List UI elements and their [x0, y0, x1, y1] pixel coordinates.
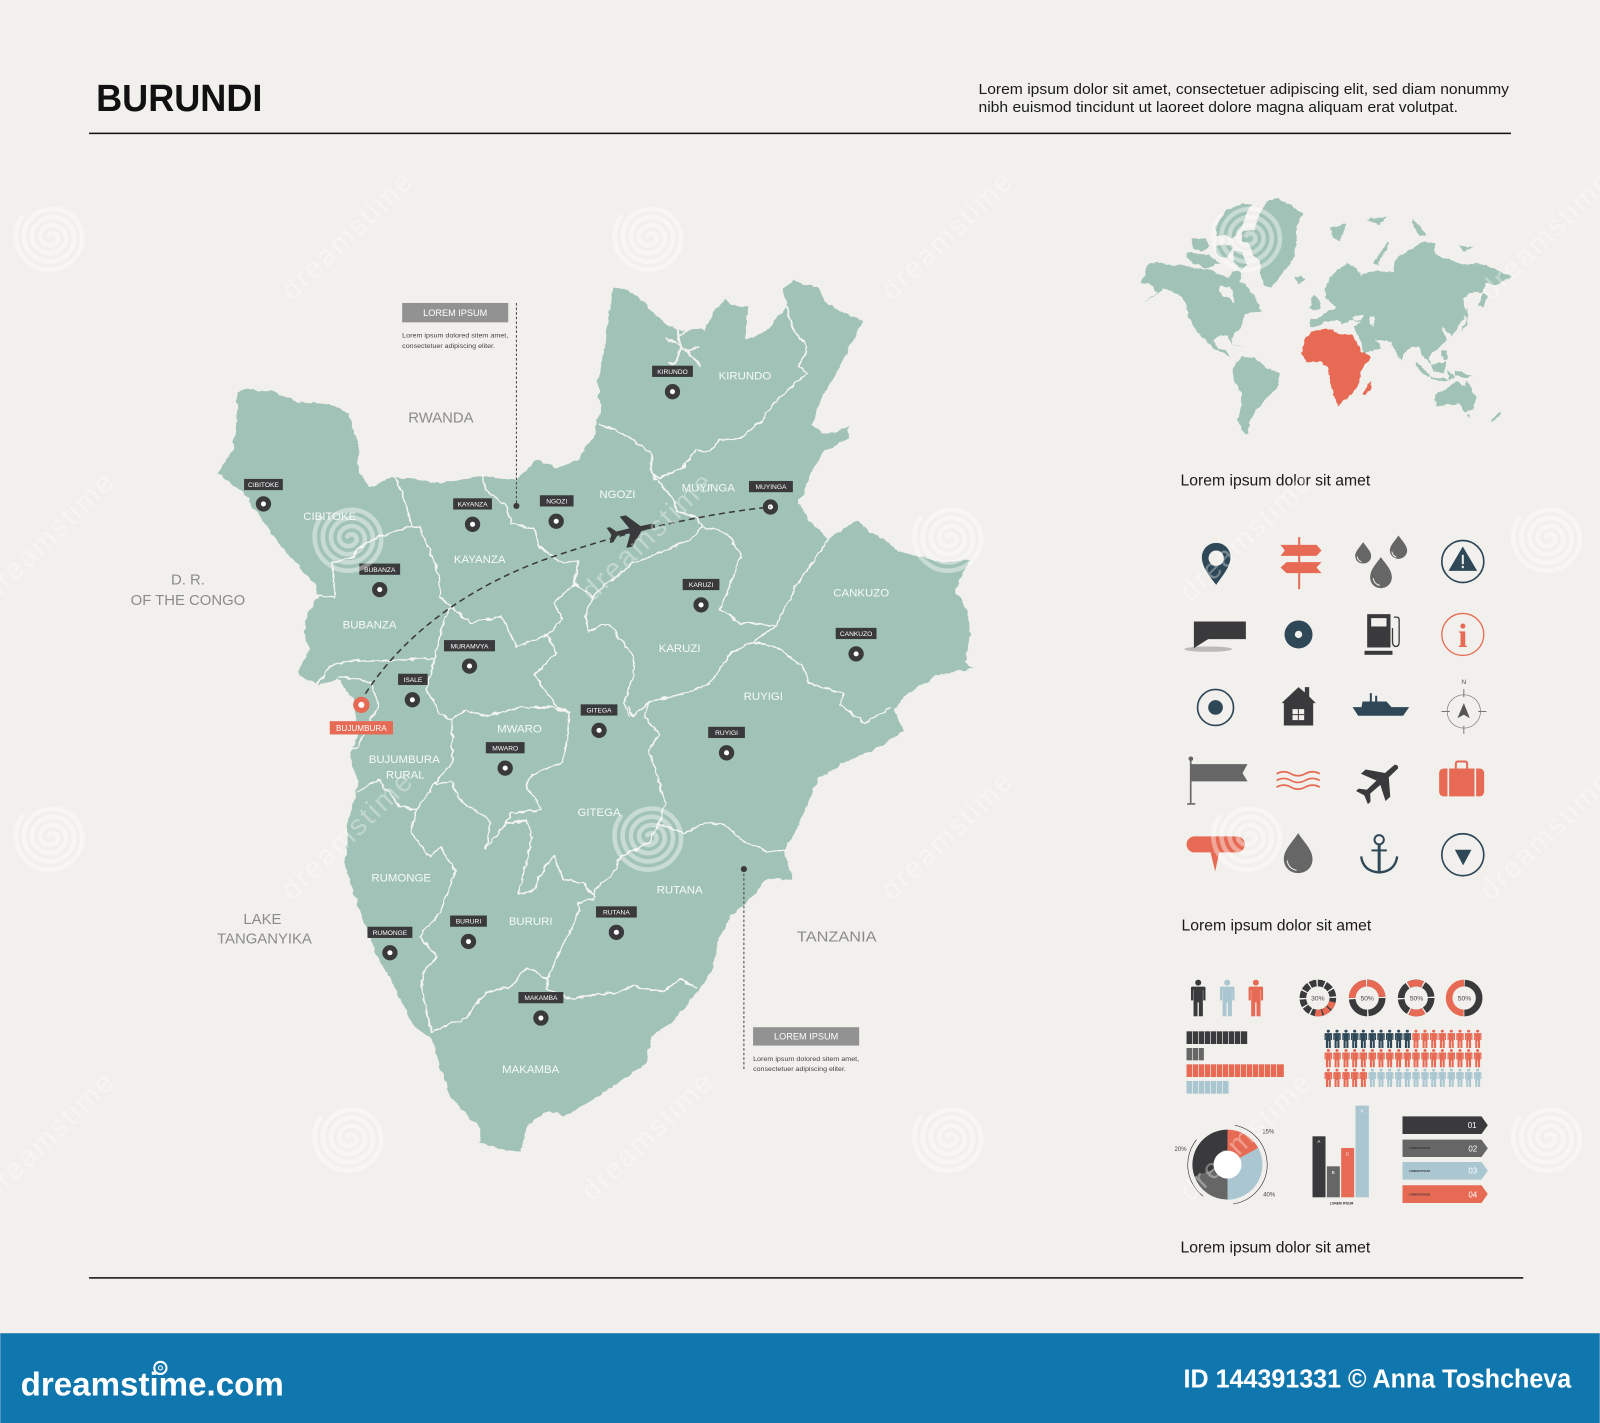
watermark overlay: dreamstime	[275, 166, 419, 307]
region names: MWARO	[497, 723, 542, 735]
icon: compass	[1441, 679, 1486, 734]
header text block: Lorem ipsum dolor sit amet, consectetuer adipiscing elit, sed diam nonummy	[979, 82, 1510, 98]
icon: house	[1282, 687, 1316, 725]
icon: flag	[1187, 756, 1248, 805]
city tags and markers: NGOZI	[546, 498, 567, 505]
neighbouring country names: TANZANIA	[797, 930, 877, 946]
region names: KIRUNDO	[719, 370, 771, 382]
heading: world map caption: Lorem ipsum dolor sit amet	[1180, 473, 1371, 490]
bar chart	[1313, 1106, 1369, 1205]
city tags and markers: ISALE	[403, 677, 423, 684]
icon: info	[1442, 613, 1484, 655]
numbered arrows: LOREM IPSUM	[1409, 1146, 1430, 1150]
watermark overlay	[0, 166, 1600, 1207]
neighbouring country names: D. R.	[171, 573, 205, 589]
pie chart	[1175, 1125, 1276, 1204]
donut labels: 50%	[1458, 995, 1471, 1002]
pie chart: 40%	[1263, 1192, 1276, 1198]
watermark overlay: dreamstime	[575, 467, 719, 608]
header text block: nibh euismod tincidunt ut laoreet dolore magna aliquam erat volutpat.	[979, 100, 1458, 116]
lake system in Kirundo	[666, 328, 700, 365]
callout: lower	[741, 866, 859, 1073]
donut labels: 50%	[1410, 995, 1423, 1002]
heading: infographic caption: Lorem ipsum dolor sit amet	[1180, 1240, 1371, 1257]
icon: speech flag	[1184, 621, 1246, 652]
city tags and markers: RUTANA	[603, 909, 630, 916]
city tags and markers: MAKAMBA	[524, 995, 558, 1002]
neighbouring country names: LAKE	[243, 912, 282, 928]
city tags and markers: BURURI	[456, 919, 481, 926]
numbered arrows: LOREM IPSUM	[1409, 1169, 1430, 1173]
region names: BUBANZA	[343, 619, 397, 631]
numbered arrows	[1402, 1116, 1488, 1203]
icon: coral map pin	[1187, 836, 1245, 871]
flight route	[365, 507, 770, 694]
region names: RUYIGI	[744, 691, 783, 703]
bar chart: LOREM IPSUM	[1330, 1201, 1353, 1205]
progress bars	[1187, 1031, 1284, 1094]
title: BURUNDI	[96, 77, 262, 119]
city tags and markers: RUMONGE	[373, 930, 408, 937]
icon: fuel pump	[1365, 614, 1399, 655]
pie chart: 15%	[1262, 1130, 1275, 1136]
capital marker: Bujumbura: BUJUMBURA	[336, 724, 387, 733]
city tags and markers: KAYANZA	[458, 501, 488, 508]
icon: large drop	[1284, 833, 1313, 873]
Africa highlight	[1302, 328, 1372, 407]
neighbouring country names: OF THE CONGO	[131, 593, 245, 609]
icon: warning	[1442, 540, 1484, 582]
neighbouring country names	[131, 410, 877, 948]
region names: MAKAMBA	[502, 1064, 560, 1076]
city tags and markers: MUYINGA	[755, 484, 787, 491]
heading: icon caption: Lorem ipsum dolor sit amet	[1182, 917, 1372, 934]
panel: icon set	[1184, 535, 1486, 876]
bar chart: C	[1346, 1152, 1350, 1157]
region names	[303, 370, 889, 1076]
donut charts	[1299, 978, 1480, 1018]
neighbouring country names: RWANDA	[408, 410, 474, 426]
region names: NGOZI	[599, 489, 635, 501]
bar chart: A	[1317, 1139, 1321, 1144]
icon: signpost	[1281, 537, 1322, 589]
inland seas	[1219, 287, 1375, 327]
icon: compass: N	[1461, 679, 1466, 686]
icon: suitcase	[1439, 761, 1484, 796]
watermark overlay: dreamstime	[875, 766, 1019, 906]
city tags and markers: MURAMVYA	[451, 643, 489, 650]
donut labels: 50%	[1361, 995, 1374, 1002]
city tags and markers: CANKUZO	[840, 631, 872, 638]
city tags and markers: MWARO	[492, 745, 518, 752]
donut labels: 30%	[1311, 995, 1325, 1002]
icon: airplane	[1350, 752, 1410, 811]
region names: GITEGA	[577, 807, 621, 819]
callout: upper: Lorem ipsum dolored sitem amet,	[402, 333, 508, 340]
icon: info: i	[1458, 618, 1467, 655]
region names: CIBITOKE	[303, 511, 357, 523]
region names: RUTANA	[657, 885, 703, 897]
city tags and markers: GITEGA	[587, 708, 612, 715]
region names: KARUZI	[659, 643, 701, 655]
callout: upper: LOREM IPSUM	[423, 308, 487, 318]
region names: KAYANZA	[454, 554, 506, 566]
region names: CANKUZO	[833, 588, 889, 600]
numbered arrows: LOREM IPSUM	[1409, 1192, 1430, 1196]
footer logo: dreamstime.com	[21, 1366, 284, 1403]
region names: BURURI	[509, 916, 553, 928]
capital marker: Bujumbura	[330, 699, 393, 734]
icon: plane on map	[605, 510, 658, 551]
icon: down arrow	[1442, 834, 1484, 876]
pie chart: 20%	[1175, 1147, 1187, 1153]
region names: RUMONGE	[371, 872, 431, 884]
donut labels	[1311, 995, 1471, 1002]
watermark overlay: dreamstime	[1174, 1067, 1318, 1207]
icon: ship	[1353, 693, 1409, 716]
icon: anchor	[1361, 835, 1397, 872]
neighbouring country names: TANGANYIKA	[217, 932, 312, 948]
people icons	[1191, 980, 1263, 1016]
callout: lower: LOREM IPSUM	[774, 1031, 838, 1041]
bar chart: K	[1361, 1108, 1365, 1113]
city tags and markers: BUBANZA	[364, 567, 396, 574]
panel: infographic elements	[1175, 978, 1488, 1205]
numbered arrows: 03	[1468, 1167, 1478, 1176]
city tags and markers: KARUZI	[689, 582, 713, 589]
footer band	[0, 1333, 1600, 1423]
footer credit: ID 144391331 © Anna Toshcheva	[1184, 1365, 1572, 1393]
icon: waves	[1277, 772, 1320, 789]
country shape with province borders	[218, 279, 972, 1153]
city tags and markers	[244, 366, 877, 1023]
numbered arrows: 01	[1468, 1121, 1477, 1130]
numbered arrows: 04	[1468, 1190, 1478, 1199]
numbered arrows: 02	[1468, 1144, 1478, 1153]
header text block	[979, 82, 1510, 116]
region names: MUYINGA	[682, 483, 735, 495]
icon: target	[1198, 689, 1234, 725]
people array	[1325, 1030, 1481, 1087]
icon: water drops	[1355, 535, 1407, 588]
icon: disc	[1285, 620, 1313, 648]
watermark overlay: dreamstime	[875, 166, 1019, 307]
callout: upper: consectetuer adipiscing eliter.	[402, 343, 495, 350]
watermark overlay: dreamstime	[575, 1067, 719, 1207]
watermark overlay: dreamstime	[275, 766, 419, 906]
watermark overlay: dreamstime	[1174, 467, 1318, 608]
bar chart: B	[1332, 1170, 1335, 1175]
panel: Burundi map	[131, 279, 972, 1153]
city tags and markers: RUYIGI	[715, 730, 738, 737]
city tags and markers: KIRUNDO	[657, 369, 688, 376]
callout: lower: consectetuer adipiscing eliter.	[753, 1066, 846, 1073]
region names: BUJUMBURA	[369, 754, 440, 766]
icon: location pin	[1202, 543, 1231, 585]
city tags and markers: CIBITOKE	[248, 482, 279, 489]
panel: world map	[1140, 198, 1512, 435]
region names: RURAL	[386, 769, 425, 781]
callout: lower: Lorem ipsum dolored sitem amet,	[753, 1056, 859, 1063]
callout: upper	[402, 303, 519, 509]
